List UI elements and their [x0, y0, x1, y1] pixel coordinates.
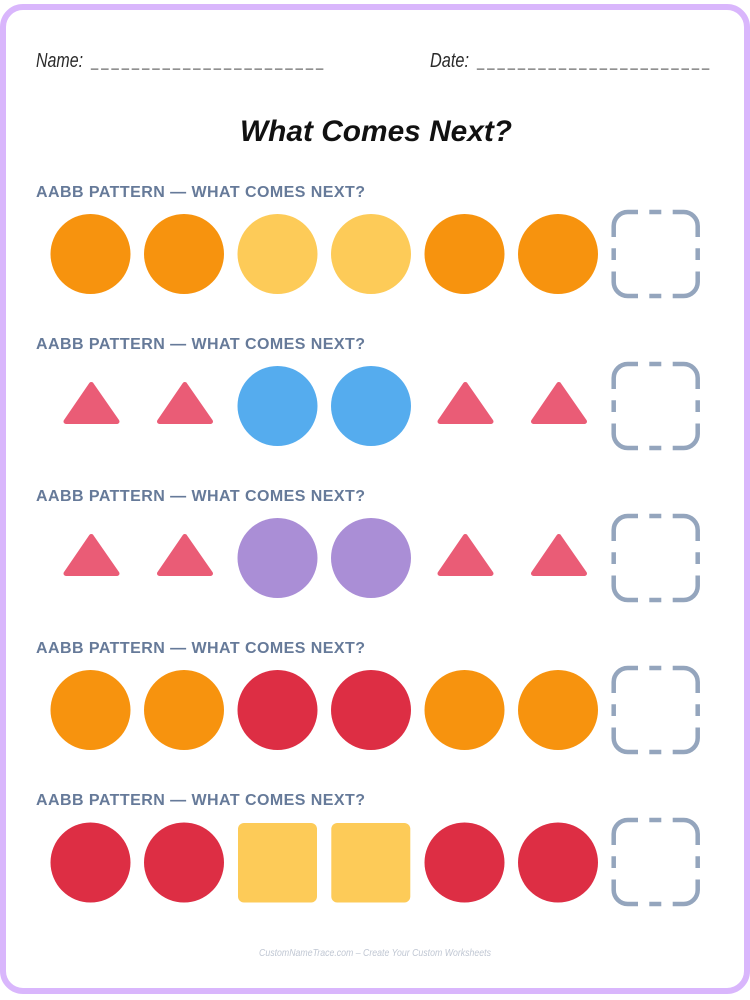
date field: Date:	[430, 50, 469, 72]
row 2 answer box	[614, 364, 698, 448]
row 3 shapes	[66, 518, 584, 598]
row 3 answer box	[614, 516, 698, 600]
row 1 label: AABB PATTERN — WHAT COMES NEXT?	[36, 184, 365, 201]
name field: _______________________	[90, 55, 326, 70]
row 4 shapes	[50, 670, 598, 750]
title: What Comes Next?	[240, 115, 512, 148]
row 2	[36, 336, 698, 448]
row 5 shapes	[50, 822, 598, 902]
row 4 label: AABB PATTERN — WHAT COMES NEXT?	[36, 640, 365, 657]
row 3	[36, 488, 698, 600]
row 1 shapes	[50, 214, 598, 294]
date field: _______________________	[476, 55, 712, 70]
name field: Name:	[36, 50, 83, 72]
row 4	[36, 640, 698, 752]
row 5	[36, 792, 698, 904]
date field	[430, 50, 712, 72]
row 5 label: AABB PATTERN — WHAT COMES NEXT?	[36, 792, 365, 809]
row 5 answer box	[614, 820, 698, 904]
row 1	[36, 184, 698, 296]
footer: CustomNameTrace.com – Create Your Custom Worksheets	[259, 948, 491, 959]
row 2 shapes	[66, 366, 584, 446]
name field	[36, 50, 326, 72]
row 3 label: AABB PATTERN — WHAT COMES NEXT?	[36, 488, 365, 505]
row 4 answer box	[614, 668, 698, 752]
row 2 label: AABB PATTERN — WHAT COMES NEXT?	[36, 336, 365, 353]
row 1 answer box	[614, 212, 698, 296]
